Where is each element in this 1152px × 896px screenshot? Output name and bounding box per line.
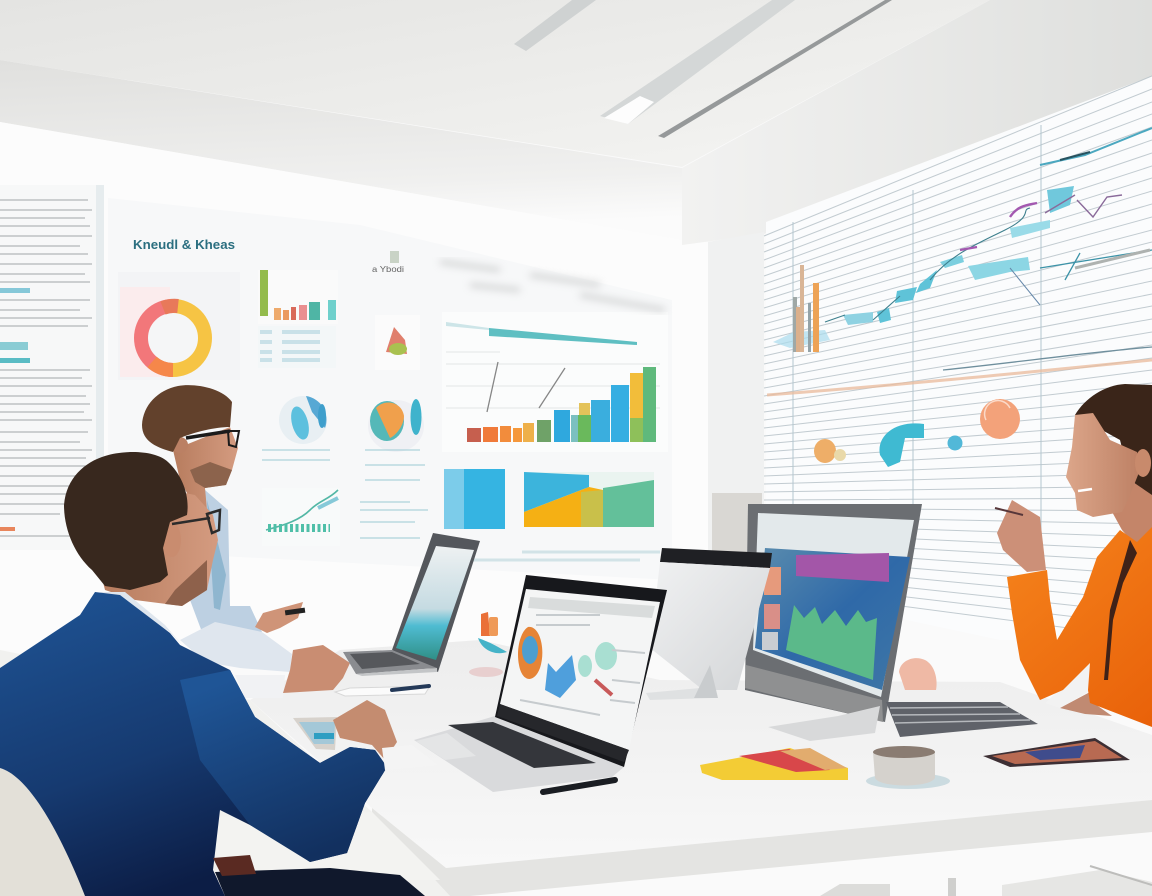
glasses — [186, 431, 239, 447]
blazer — [0, 592, 387, 896]
chart: main bar chart — [442, 312, 668, 452]
neck and face — [100, 490, 218, 606]
coffee cup — [866, 746, 950, 789]
icon: small teal circle — [948, 436, 962, 450]
phone on desk — [293, 717, 337, 750]
hair — [1075, 384, 1152, 495]
colour swatches — [700, 748, 848, 780]
panel: table block — [258, 326, 336, 368]
glasses — [172, 510, 220, 533]
man in front — [0, 452, 425, 896]
man in back — [142, 385, 350, 698]
icon: teal ring — [879, 423, 924, 467]
forearm — [1060, 692, 1112, 716]
desk objects behind — [335, 612, 507, 696]
sleeve — [180, 670, 387, 862]
jacket — [1007, 527, 1152, 727]
icon: small header mark — [372, 251, 404, 274]
shirt — [190, 490, 262, 640]
panel: left wall document — [0, 185, 104, 550]
chart: small bars — [258, 270, 338, 324]
white monitor back — [646, 548, 772, 700]
chart: donut — [118, 272, 240, 380]
hair — [64, 452, 188, 590]
chair — [0, 768, 85, 896]
neck — [1100, 480, 1152, 545]
laptop front — [414, 575, 667, 792]
panel: blurred streaks — [440, 262, 665, 310]
face — [1066, 413, 1140, 517]
tablet — [983, 738, 1130, 767]
table — [0, 640, 1152, 896]
paper under laptop — [382, 745, 438, 770]
icon: orange blob — [814, 439, 846, 463]
pink object — [899, 658, 937, 690]
icon: drop chart — [375, 315, 420, 370]
icon: small header mark: a Ybodi — [372, 265, 404, 274]
hair — [142, 385, 232, 452]
chart: wall bars — [793, 265, 819, 352]
collar — [100, 592, 182, 645]
heading: dashboard title: Kneudl & Kheas — [133, 237, 235, 252]
icon: orange sphere — [980, 399, 1020, 439]
woman — [995, 384, 1152, 727]
chart: line sparkline — [262, 488, 340, 546]
chart: blue block — [444, 469, 505, 529]
chart: pie — [368, 399, 424, 452]
laptop rear — [343, 533, 480, 676]
panel: right wall data display — [764, 76, 1152, 640]
hands — [255, 602, 303, 633]
chart: area chart — [524, 472, 654, 527]
chart: wave lines — [773, 128, 1152, 348]
chart: globe — [279, 396, 327, 444]
hand on phone — [333, 700, 397, 760]
watch strap — [213, 855, 256, 876]
hand — [997, 500, 1046, 572]
furniture under the table — [820, 866, 1152, 896]
ceiling lights — [514, 0, 892, 138]
neck and face — [173, 427, 238, 510]
large monitor — [712, 493, 922, 741]
trousers — [215, 868, 425, 896]
panel: main wall dashboard — [108, 198, 672, 580]
keyboard — [886, 702, 1038, 737]
